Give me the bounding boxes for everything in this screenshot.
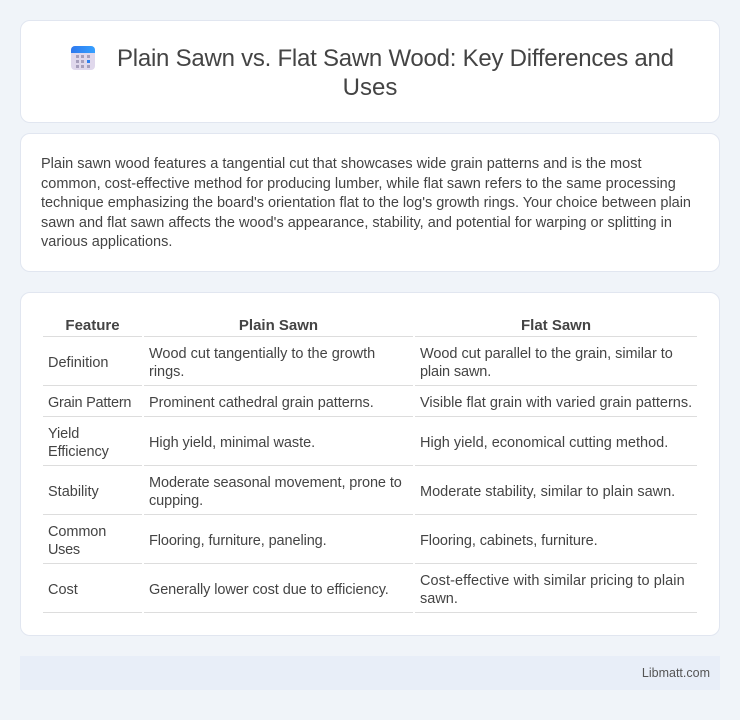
table rows: Cost xyxy=(48,582,78,598)
table rows: Visible flat grain with varied grain patterns. xyxy=(420,395,692,411)
table rows: plain sawn. xyxy=(420,364,491,380)
table rows: Efficiency xyxy=(48,444,109,460)
table rows: Yield xyxy=(48,426,79,442)
table rows: Stability xyxy=(48,484,99,500)
panel: introduction text xyxy=(20,133,720,272)
footer xyxy=(20,656,720,690)
table rows: Generally lower cost due to efficiency. xyxy=(149,582,389,598)
text block: introduction: sawn and flat sawn affects the wood's appearance, stability, and potential for warping or splitting in xyxy=(41,215,672,231)
table rows: Wood cut tangentially to the growth xyxy=(149,346,375,362)
title: Uses xyxy=(343,74,397,101)
table rows: Cost-effective with similar pricing to plain xyxy=(420,573,685,589)
table rows: Moderate stability, similar to plain sawn. xyxy=(420,484,675,500)
table rows: Prominent cathedral grain patterns. xyxy=(149,395,374,411)
table header xyxy=(65,317,591,334)
table rows: Common xyxy=(48,524,106,540)
table rows: Grain Pattern xyxy=(48,395,131,411)
text block: introduction: various applications. xyxy=(41,234,172,250)
table rows: High yield, minimal waste. xyxy=(149,435,315,451)
table rows: High yield, economical cutting method. xyxy=(420,435,668,451)
footer credit: Libmatt.com xyxy=(642,666,710,680)
table rows: sawn. xyxy=(420,591,458,607)
table rows xyxy=(43,336,697,613)
table rows: Flooring, furniture, paneling. xyxy=(149,533,327,549)
table rows: Uses xyxy=(48,542,80,558)
panel: comparison table xyxy=(20,292,720,636)
table rows: cupping. xyxy=(149,493,203,509)
table rows: rings. xyxy=(149,364,184,380)
title xyxy=(117,45,674,101)
table header: Flat Sawn xyxy=(521,317,591,334)
panel: title card xyxy=(20,20,720,123)
table rows: Wood cut parallel to the grain, similar to xyxy=(420,346,673,362)
icon: calendar xyxy=(71,46,95,70)
table rows: Moderate seasonal movement, prone to xyxy=(149,475,402,491)
table header: Feature xyxy=(65,317,120,334)
text block: introduction xyxy=(41,156,691,250)
text block: introduction: Plain sawn wood features a tangential cut that showcases wide grain patterns and is the most xyxy=(41,156,641,172)
text block: introduction: common, cost-effective method for producing lumber, while flat sawn refers to the same processing xyxy=(41,176,676,192)
table rows: Definition xyxy=(48,355,108,371)
title: Plain Sawn vs. Flat Sawn Wood: Key Differences and xyxy=(117,45,674,72)
table header: Plain Sawn xyxy=(239,317,318,334)
table rows: Flooring, cabinets, furniture. xyxy=(420,533,598,549)
text block: introduction: technique emphasizing the board's orientation flat to the log's growth rings. Your choice between plain xyxy=(41,195,691,211)
